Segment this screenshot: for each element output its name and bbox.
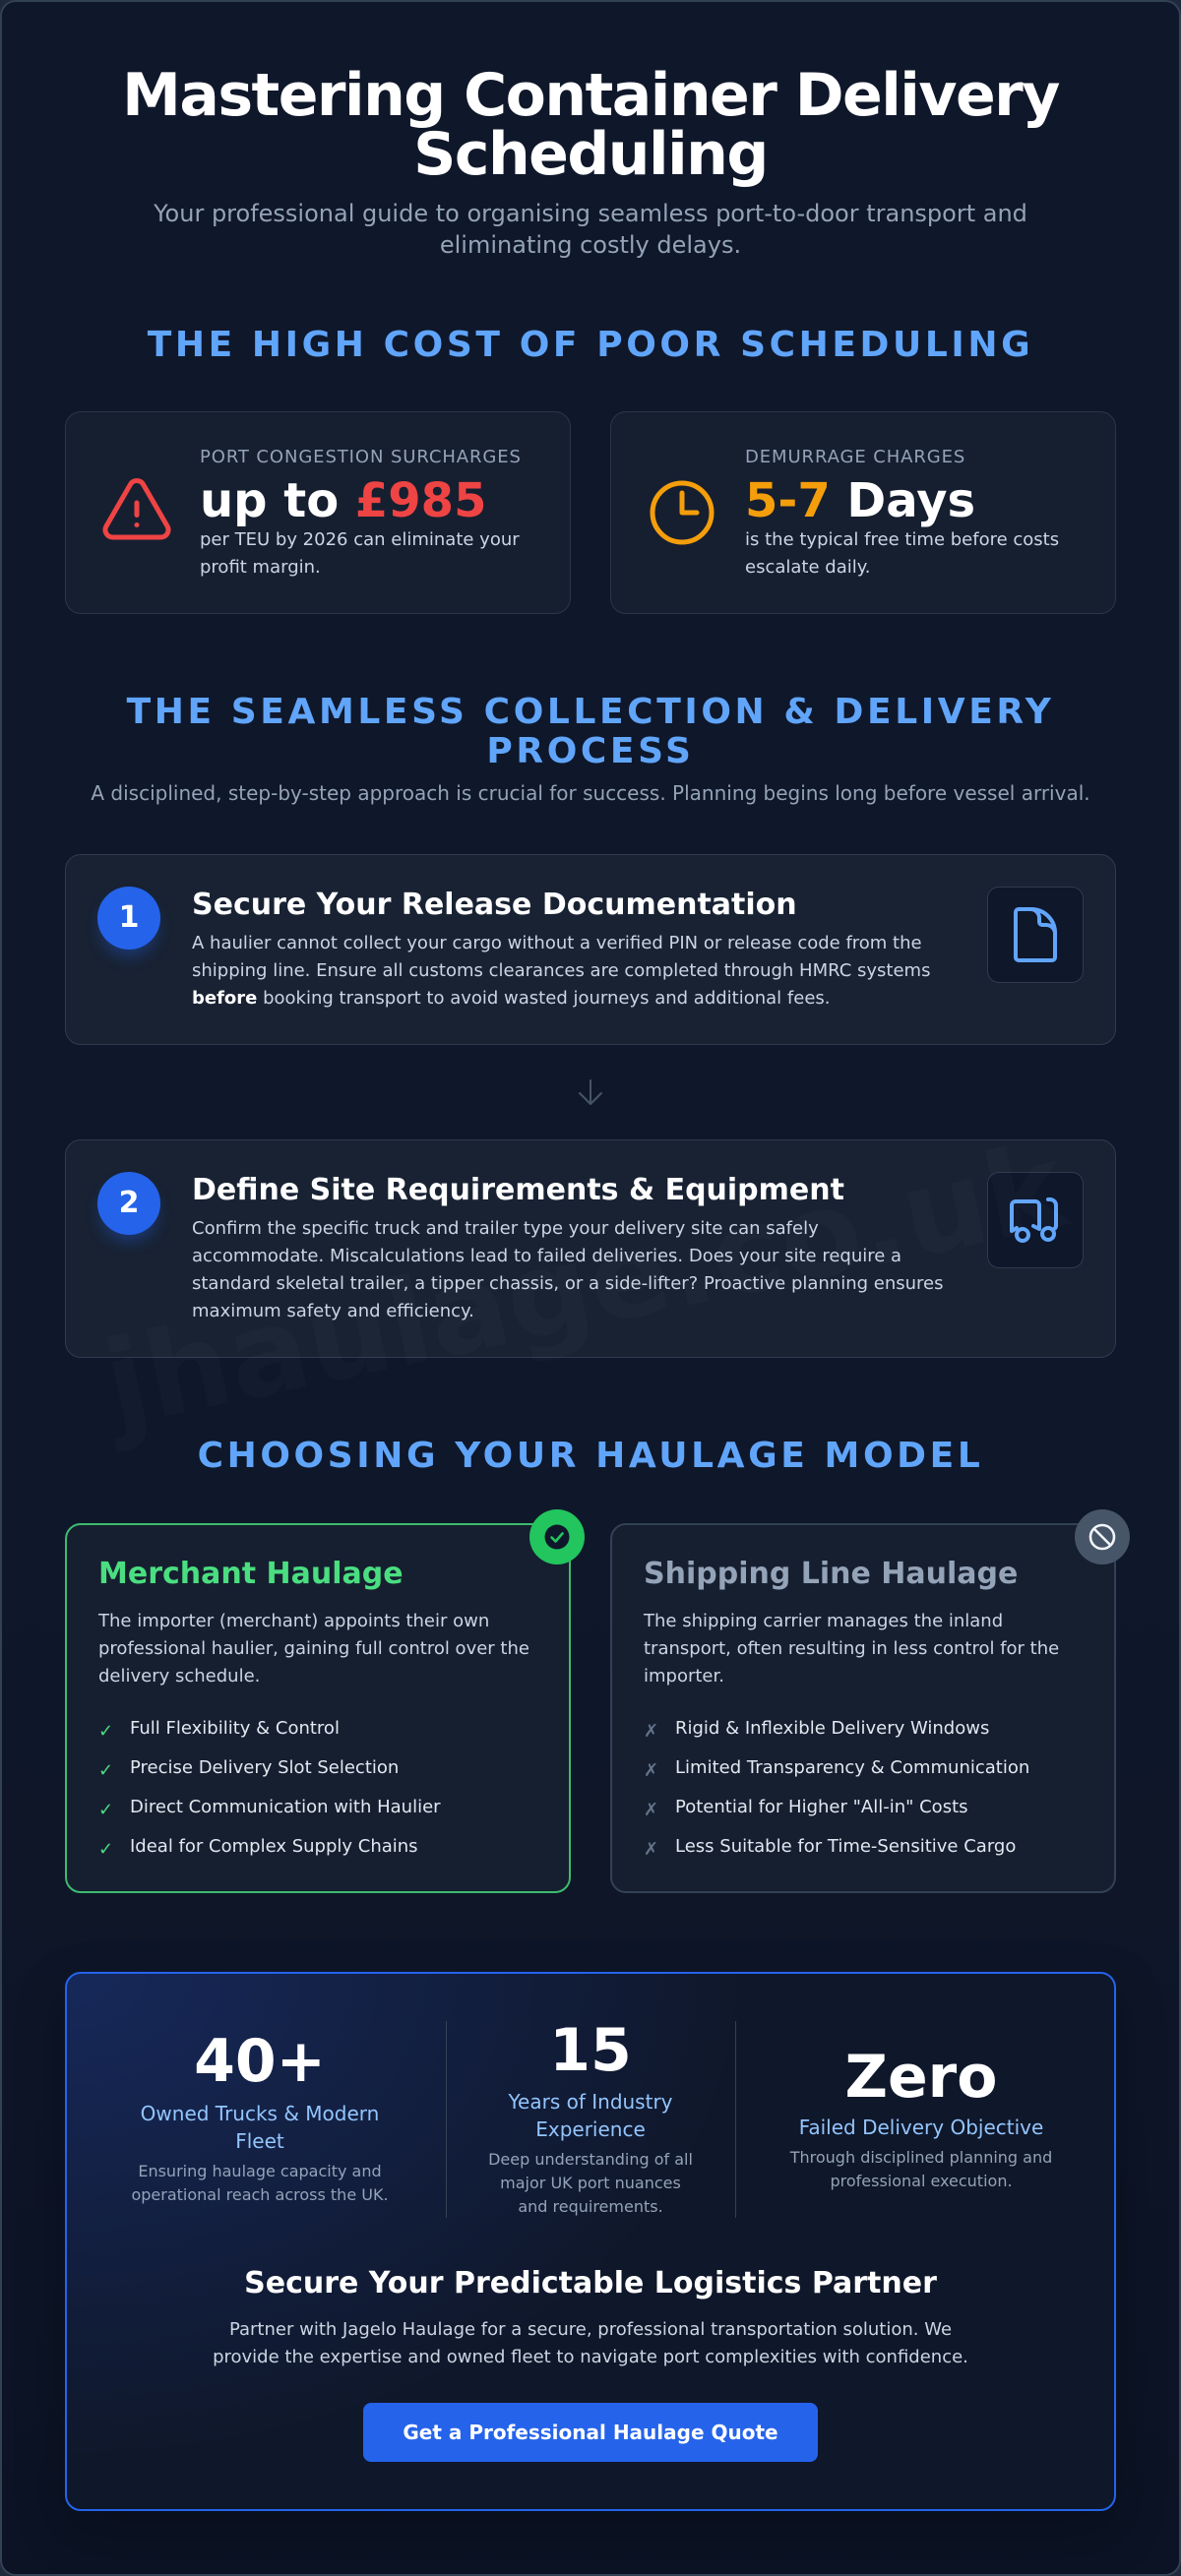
- step 2 body: maximum safety and efficiency.: [192, 1301, 474, 1321]
- icon: truck: [987, 1172, 1084, 1268]
- feature 2: ✓: [98, 1760, 113, 1781]
- divider: [735, 2021, 736, 2218]
- detail: operational reach across the UK.: [131, 2185, 389, 2204]
- step 1 body: [192, 933, 930, 1009]
- label: [508, 2090, 673, 2141]
- step 2 heading: Define Site Requirements & Equipment: [192, 1173, 844, 1207]
- label: PORT CONGESTION SURCHARGES: [200, 447, 522, 467]
- process intro text: A disciplined, step-by-step approach is crucial for success. Planning begins long before vessel arrival.: [91, 781, 1090, 805]
- label: Experience: [535, 2117, 646, 2141]
- detail: [488, 2150, 693, 2216]
- detail: professional execution.: [830, 2172, 1013, 2190]
- label: DEMURRAGE CHARGES: [745, 447, 965, 467]
- description: [200, 529, 520, 578]
- merchant description: The importer (merchant) appoints their own: [98, 1611, 489, 1631]
- detail: and requirements.: [518, 2197, 663, 2216]
- feature 4: ✗: [644, 1839, 658, 1860]
- heading: process: THE SEAMLESS COLLECTION & DELIVERY: [127, 692, 1054, 732]
- heading: process: PROCESS: [486, 731, 695, 771]
- step number 1: 1: [119, 900, 139, 935]
- feature 3: Direct Communication with Haulier: [130, 1797, 441, 1817]
- description: escalate daily.: [745, 557, 871, 578]
- subtitle: Your professional guide to organising seamless port-to-door transport and: [154, 200, 1027, 227]
- detail: [131, 2162, 389, 2204]
- detail: Deep understanding of all: [488, 2150, 693, 2169]
- detail: major UK port nuances: [500, 2174, 681, 2192]
- badge: no symbol: [1075, 1509, 1130, 1564]
- panel: call to action: [65, 1972, 1116, 2511]
- title: Mastering Container Delivery: [122, 61, 1059, 130]
- panel: step 2: [65, 1139, 1116, 1358]
- title: [122, 61, 1059, 189]
- feature 1: ✓: [98, 1721, 113, 1742]
- description: [745, 529, 1059, 578]
- heading: haulage model: CHOOSING YOUR HAULAGE MODEL: [198, 1436, 983, 1476]
- shipping line feature list: [644, 1718, 1029, 1860]
- feature 2: Limited Transparency & Communication: [675, 1757, 1029, 1778]
- panel: merchant haulage: [65, 1523, 571, 1893]
- label: Failed Delivery Objective: [799, 2116, 1043, 2139]
- subtitle: eliminating costly delays.: [440, 231, 741, 259]
- icon: clock: [650, 480, 715, 545]
- value: up to £985: [200, 473, 486, 528]
- shipping line description: The shipping carrier manages the inland: [644, 1611, 1003, 1631]
- feature 1: Rigid & Inflexible Delivery Windows: [675, 1718, 989, 1739]
- feature 4: Less Suitable for Time-Sensitive Cargo: [675, 1836, 1016, 1857]
- feature 1: ✗: [644, 1721, 658, 1742]
- shipping line heading: Shipping Line Haulage: [644, 1557, 1018, 1591]
- panel: port congestion surcharges: [65, 411, 571, 614]
- call to action heading: Secure Your Predictable Logistics Partner: [244, 2266, 937, 2300]
- button: get a quote: [363, 2403, 818, 2462]
- step 2 body: Confirm the specific truck and trailer type your delivery site can safely: [192, 1218, 819, 1239]
- feature 4: ✓: [98, 1839, 113, 1860]
- value: 15: [549, 2016, 632, 2085]
- icon: document: [987, 887, 1084, 983]
- label: Fleet: [235, 2129, 284, 2153]
- feature 3: Potential for Higher "All-in" Costs: [675, 1797, 968, 1817]
- feature 3: ✓: [98, 1800, 113, 1820]
- value: 40+: [194, 2027, 326, 2096]
- panel: step 1: [65, 854, 1116, 1045]
- merchant description: [98, 1611, 529, 1687]
- step 1 body: A haulier cannot collect your cargo without a verified PIN or release code from the: [192, 933, 922, 953]
- feature 4: Ideal for Complex Supply Chains: [130, 1836, 418, 1857]
- stat: zero failed: [789, 2043, 1052, 2190]
- stat: owned trucks: [131, 2027, 389, 2204]
- step 1 body: before booking transport to avoid wasted journeys and additional fees.: [192, 988, 831, 1009]
- step 2 body: accommodate. Miscalculations lead to failed deliveries. Does your site require a: [192, 1246, 901, 1266]
- step number 2: [97, 1172, 160, 1235]
- subtitle: [154, 200, 1027, 259]
- feature 2: ✗: [644, 1760, 658, 1781]
- call to action text: [213, 2319, 968, 2367]
- shipping line description: transport, often resulting in less control for the: [644, 1638, 1059, 1659]
- detail: Ensuring haulage capacity and: [138, 2162, 382, 2180]
- step number 1: [97, 887, 160, 950]
- shipping line description: [644, 1611, 1059, 1687]
- description: profit margin.: [200, 557, 321, 578]
- step 2 body: [192, 1218, 943, 1321]
- merchant feature list: [98, 1718, 441, 1860]
- header: [122, 61, 1059, 259]
- detail: [789, 2148, 1052, 2190]
- button: get a quote: Get a Professional Haulage Quote: [403, 2421, 778, 2444]
- description: per TEU by 2026 can eliminate your: [200, 529, 520, 550]
- step 1 body: shipping line. Ensure all customs clearances are completed through HMRC systems: [192, 960, 930, 981]
- label: Owned Trucks & Modern: [141, 2102, 379, 2125]
- heading: process: [126, 692, 1054, 771]
- value: Zero: [844, 2043, 998, 2112]
- description: is the typical free time before costs: [745, 529, 1059, 550]
- detail: Through disciplined planning and: [790, 2148, 1052, 2167]
- stat: years of experience: [488, 2016, 693, 2216]
- step 1 heading: Secure Your Release Documentation: [192, 888, 797, 922]
- merchant heading: Merchant Haulage: [98, 1557, 404, 1591]
- step number 2: 2: [119, 1186, 139, 1220]
- icon: warning triangle: [102, 478, 171, 539]
- call to action text: Partner with Jagelo Haulage for a secure, professional transportation solution. We: [229, 2319, 952, 2340]
- label: [141, 2102, 379, 2153]
- panel: shipping line haulage: [610, 1523, 1116, 1893]
- feature 3: ✗: [644, 1800, 658, 1820]
- step 2 body: standard skeletal trailer, a tipper chassis, or a side-lifter? Proactive planning ensures: [192, 1273, 943, 1294]
- heading: high cost: THE HIGH COST OF POOR SCHEDULING: [148, 325, 1033, 365]
- watermark: jhaulage.co.uk: [93, 1118, 1077, 1454]
- feature 1: Full Flexibility & Control: [130, 1718, 340, 1739]
- panel: demurrage charges: [610, 411, 1116, 614]
- feature 2: Precise Delivery Slot Selection: [130, 1757, 399, 1778]
- divider: [446, 2021, 447, 2218]
- arrow: step 1 to step 2: [579, 1079, 602, 1105]
- title: Scheduling: [413, 120, 768, 189]
- call to action text: provide the expertise and owned fleet to navigate port complexities with confidence.: [213, 2347, 968, 2367]
- label: Years of Industry: [508, 2090, 673, 2114]
- badge: check: [529, 1509, 585, 1564]
- value: 5-7 Days: [745, 473, 975, 528]
- merchant description: professional haulier, gaining full control over the: [98, 1638, 529, 1659]
- shipping line description: importer.: [644, 1666, 724, 1687]
- merchant description: delivery schedule.: [98, 1666, 260, 1687]
